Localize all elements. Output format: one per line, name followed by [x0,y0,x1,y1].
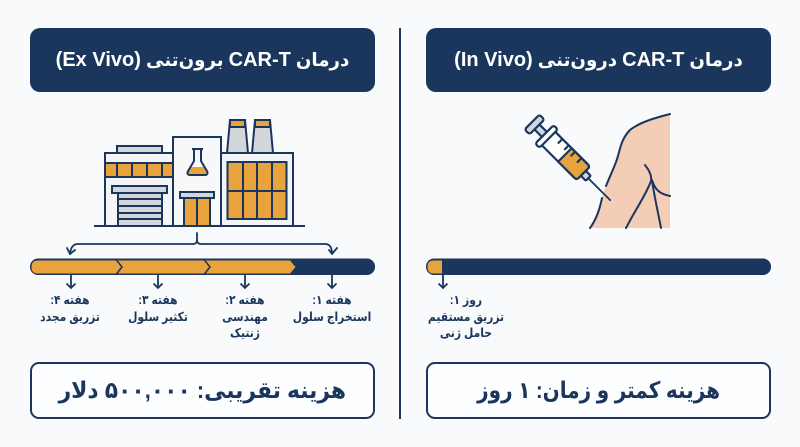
cost box: in vivo [426,362,771,419]
heading: ex vivo: درمان CAR-T برون‌تنی (Ex Vivo) [56,49,349,71]
arrows: weeks [66,275,336,288]
label: week 3: هفته ۳: [138,293,178,307]
label: day 1: روز ۱: [450,293,482,307]
label: week 1: هفته ۱: [312,293,352,307]
icon: factory [94,120,305,226]
label: week 3 [128,293,188,324]
label: day 1: تزریق مستقیم [428,310,504,324]
icon: arm [590,114,670,228]
heading: in vivo [426,28,771,92]
divider between panels [399,28,401,419]
heading: ex vivo [30,28,375,92]
label: week 4 [40,293,100,324]
label: week 4: هفته ۴: [50,293,90,307]
bracket with arrows [67,233,337,254]
label: day 1: حامل ژنی [440,326,492,340]
label: week 2 [222,293,268,340]
label: week 1: استخراج سلول [293,310,371,324]
label: week 4: تزریق مجدد [40,310,100,324]
arrow: day 1 [438,275,448,288]
timeline: in vivo [426,258,771,275]
label: week 2: مهندسی [222,310,268,324]
label: week 1 [293,293,371,324]
cost box: ex vivo: هزینه تقریبی: ۵۰۰,۰۰۰ دلار [59,377,346,403]
icon: syringe [523,113,619,209]
label: week 3: تکثیر سلول [128,310,188,324]
cost box: ex vivo [30,362,375,419]
label: week 2: ژنتیک [230,326,260,340]
heading: in vivo: درمان CAR-T درون‌تنی (In Vivo) [454,49,743,71]
label: day 1 [428,293,504,340]
label: week 2: هفته ۲: [225,293,265,307]
cost box: in vivo: هزینه کمتر و زمان: ۱ روز [477,377,720,403]
timeline: ex vivo [30,258,375,275]
